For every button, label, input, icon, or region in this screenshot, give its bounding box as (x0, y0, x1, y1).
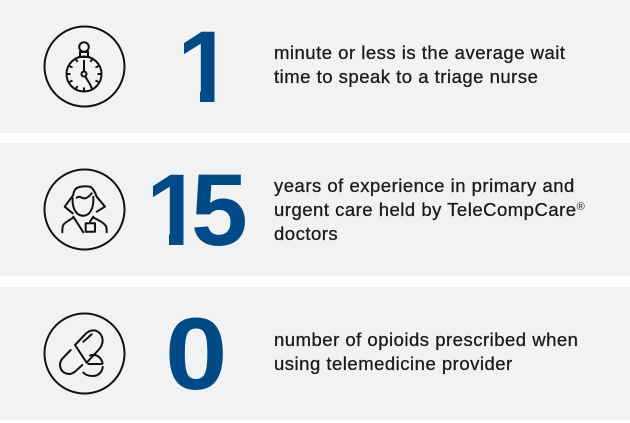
text: experience description: urgent care held by TeleCompCare® (274, 199, 585, 220)
text: experience description: years of experience in primary and (274, 175, 575, 196)
stat: 0: 0 (165, 297, 227, 411)
text: opioids description: number of opioids prescribed when (274, 329, 578, 350)
text: wait time description (274, 42, 566, 88)
digit 5 of 15: 5 (191, 153, 248, 267)
icon: stopwatch (44, 26, 126, 108)
panel: opioids (0, 287, 630, 420)
stat: 15 (152, 153, 248, 267)
icon: doctor (44, 168, 126, 250)
stat: 1: 1 (177, 10, 234, 124)
panel: wait time (0, 0, 630, 133)
digit 1 of 15: 1 (146, 153, 203, 267)
text: experience description: doctors (274, 223, 338, 244)
icon: pills (44, 312, 126, 394)
text: opioids description (274, 329, 578, 374)
text: wait time description: time to speak to a triage nurse (274, 66, 538, 87)
text: experience description (274, 175, 585, 244)
text: opioids description: using telemedicine provider (274, 353, 513, 374)
panel: experience (0, 143, 630, 276)
text: wait time description: minute or less is the average wait (274, 42, 566, 63)
